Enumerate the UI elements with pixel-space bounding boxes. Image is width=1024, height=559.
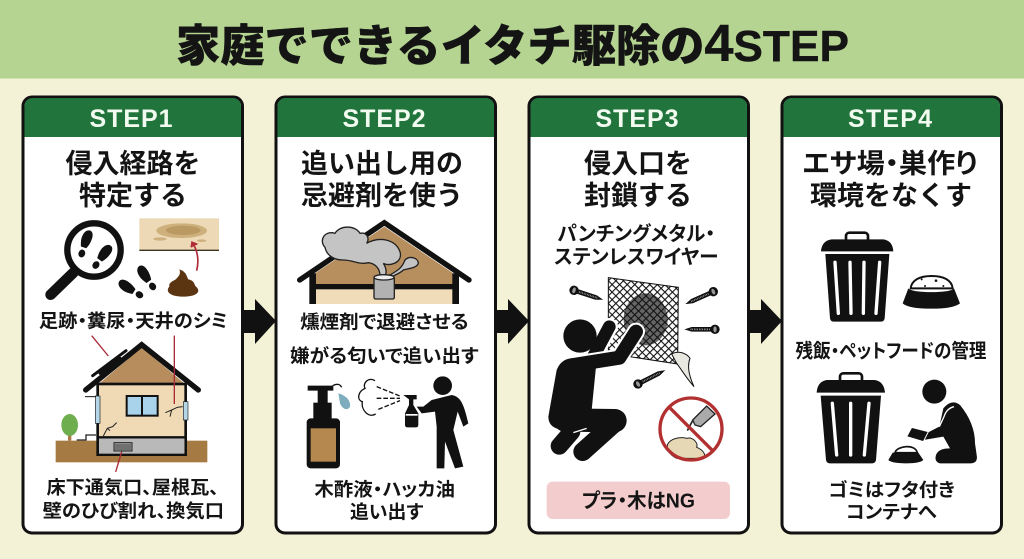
step 1 illustrations (39, 218, 228, 522)
icon: food bowl (903, 276, 960, 309)
leader lines (92, 336, 174, 472)
icon: droppings (168, 269, 198, 297)
step 4 label: STEP4 (848, 105, 932, 133)
icon: kneeling person (548, 319, 636, 452)
icon: trash can 1 (821, 233, 893, 322)
panel: step 2 (276, 97, 496, 533)
title: 家庭でできるイタチ駆除の4STEP (176, 15, 849, 73)
caption: entry points: 床下通気口、屋根瓦、 (46, 477, 219, 498)
caption: lidded containers: コンテナへ (846, 501, 937, 522)
icon: attic with fumigant (300, 223, 469, 304)
step 2 heading (301, 149, 463, 211)
icon: person spraying (403, 376, 468, 468)
step 4 heading: 環境をなくす (810, 181, 972, 211)
step 4 heading (802, 149, 978, 211)
step 3 heading (584, 149, 692, 211)
step 3 badge (530, 98, 747, 137)
step 1 heading: 侵入経路を (66, 149, 200, 179)
step 1 label: STEP1 (90, 105, 173, 133)
icon: no sealant sign (660, 398, 722, 460)
icon: person with bowl (888, 380, 977, 463)
icon: trash can 2 (817, 373, 885, 463)
panel: step 4 (782, 97, 1002, 533)
step 2 badge (278, 98, 494, 137)
arrow: step 3 to 4 (749, 299, 782, 344)
step 1 heading (66, 149, 200, 211)
step 3 heading: 封鎖する (584, 181, 692, 211)
arrow: step 2 to 3 (496, 299, 529, 344)
caption: repellent smell: 嫌がる匂いで追い出す (290, 346, 479, 367)
caption: drive out: 追い出す (350, 501, 424, 522)
caption: materials (554, 222, 718, 268)
icon: magnifier with footprints (51, 223, 121, 295)
step 3 heading: 侵入口を (584, 149, 692, 179)
step 1 heading: 特定する (79, 181, 187, 211)
step 2 heading: 忌避剤を使う (301, 181, 463, 211)
arrow: droppings to stain (191, 242, 198, 271)
step 2 label: STEP2 (342, 105, 426, 133)
title band (0, 0, 1024, 78)
step 1 badge (24, 98, 241, 137)
step 4 badge (784, 98, 1000, 137)
icon: wire mesh over hole (608, 278, 694, 387)
icon: screws (568, 284, 720, 390)
icon: spray mist (359, 379, 400, 415)
icon: ceiling stain (139, 218, 219, 251)
caption: oils: 木酢液・ハッカ油 (314, 479, 455, 500)
step 2 heading: 追い出し用の (301, 149, 463, 179)
caption: lidded containers: ゴミはフタ付き (828, 480, 955, 501)
caption: entry points (43, 477, 224, 522)
icon: footprints (116, 264, 159, 301)
caption: entry points: 壁のひび割れ、換気口 (43, 501, 224, 522)
step 3 illustrations (547, 222, 730, 519)
panel: step 1 (23, 97, 242, 533)
step 4 heading: エサ場・巣作り (802, 149, 978, 179)
step 4 illustrations (795, 233, 986, 522)
caption: lidded containers (828, 480, 955, 522)
caption: signs: 足跡・糞尿・天井のシミ (39, 310, 228, 331)
callout: plastic and wood not allowed (547, 482, 730, 519)
caption: materials: パンチングメタル・ (557, 222, 715, 246)
icon: repellent bottle (307, 384, 350, 468)
step 3 label: STEP3 (596, 105, 678, 133)
callout: plastic and wood not allowed: プラ・木はNG (582, 490, 695, 513)
icon: house (56, 345, 207, 462)
panel: step 3 (529, 97, 748, 533)
caption: materials: ステンレスワイヤー (554, 246, 718, 268)
caption: fumigant: 燻煙剤で退避させる (300, 311, 468, 332)
caption: food management: 残飯・ペットフードの管理 (795, 339, 986, 362)
step 2 illustrations (290, 223, 479, 522)
arrow: step 1 to 2 (243, 299, 276, 344)
